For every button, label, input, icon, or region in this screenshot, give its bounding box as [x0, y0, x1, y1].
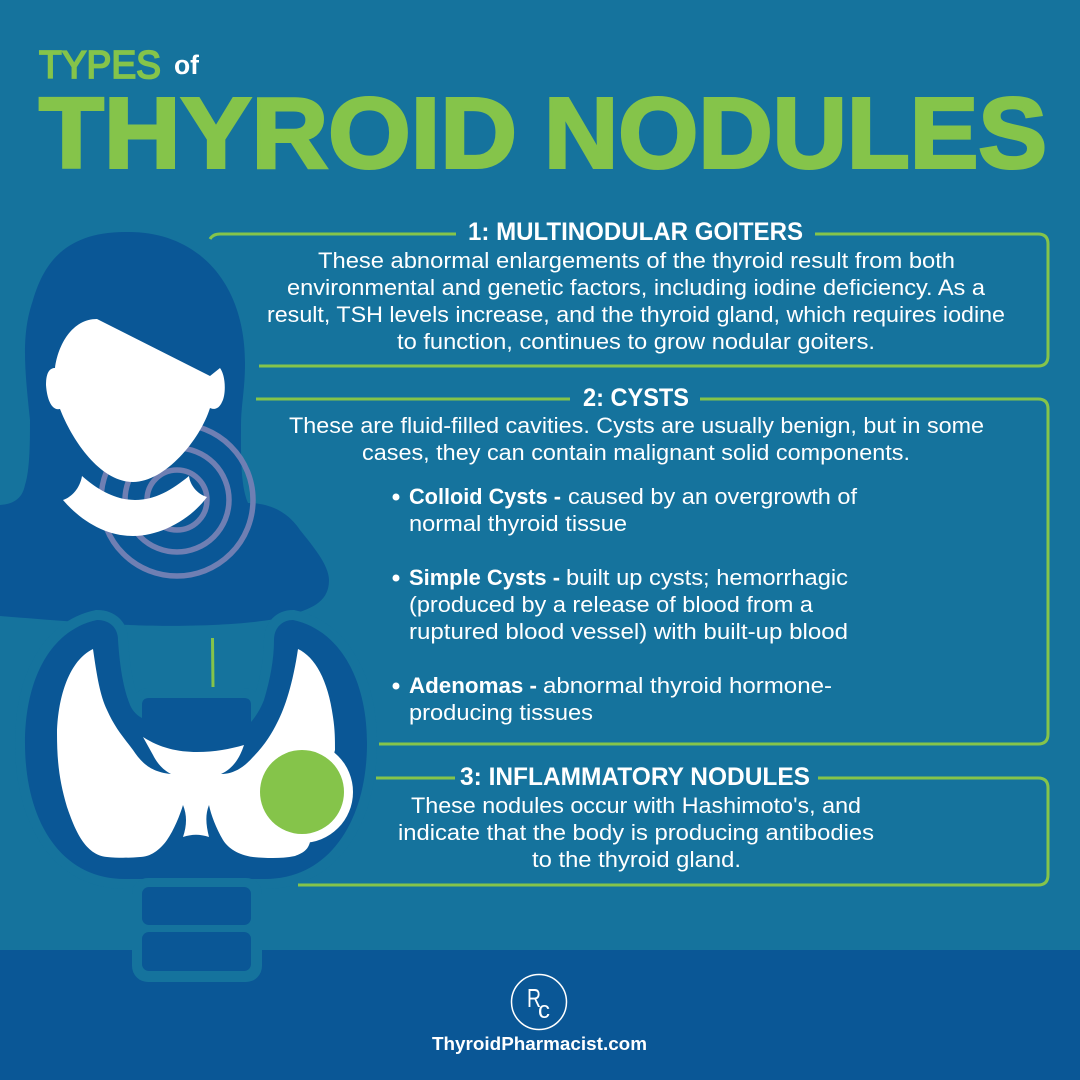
logo: RC monogram: [512, 974, 566, 1030]
title: NODULES: [544, 78, 1047, 190]
text: inflammatory nodules description: These nodules occur with Hashimoto's, and: [411, 793, 861, 818]
bullet: simple cysts: ruptured blood vessel) with built-up blood: [409, 619, 848, 644]
text: cysts description: These are fluid-filled cavities. Cysts are usually benign, but in some: [289, 413, 984, 438]
title: [39, 44, 1047, 190]
text: multinodular goiters description: These abnormal enlargements of the thyroid result from both: [318, 248, 955, 273]
text: inflammatory nodules description: to the thyroid gland.: [532, 847, 741, 872]
panel: multinodular goiters frame: [210, 234, 1048, 366]
icon: woman silhouette with neck rings: [0, 232, 329, 626]
text: multinodular goiters description: environmental and genetic factors, including iodine deficiency. As a: [287, 275, 986, 300]
text: inflammatory nodules description: indicate that the body is producing antibodies: [398, 820, 874, 845]
text: multinodular goiters description: result, TSH levels increase, and the thyroid gland, which requires iodine: [267, 302, 1005, 327]
title: THYROID: [39, 78, 517, 190]
text: multinodular goiters description: [267, 248, 1005, 354]
bullet: simple cysts: (produced by a release of blood from a: [409, 592, 814, 617]
text: inflammatory nodules description: [398, 793, 874, 872]
footer band: [0, 950, 1080, 1080]
icon: thyroid gland with nodule: [25, 620, 367, 982]
bullet: colloid cysts: normal thyroid tissue: [409, 511, 627, 536]
title: of: [174, 50, 200, 80]
panel: cysts frame: [256, 399, 1048, 744]
logo: RC monogram: c: [538, 997, 550, 1024]
text: multinodular goiters description: to function, continues to grow nodular goiters.: [397, 329, 875, 354]
text: cysts description: [289, 413, 984, 465]
heading: inflammatory nodules: 3: INFLAMMATORY NODULES: [460, 763, 810, 791]
connector line: [211, 638, 214, 687]
bullet: adenomas: [392, 673, 832, 725]
bullet: colloid cysts: caused by an overgrowth of: [568, 484, 858, 509]
heading: cysts: 2: CYSTS: [583, 384, 689, 412]
bullet: adenomas: abnormal thyroid hormone-: [543, 673, 832, 698]
bullet: colloid cysts: Colloid Cysts -: [409, 484, 561, 509]
bullet: adenomas: producing tissues: [409, 700, 593, 725]
logo: RC monogram: R: [527, 983, 541, 1013]
bullet: simple cysts: Simple Cysts -: [409, 565, 560, 590]
bullet: simple cysts: [392, 565, 848, 644]
panel: inflammatory nodules frame: [298, 778, 1048, 885]
bullet: adenomas: Adenomas -: [409, 673, 537, 698]
title: TYPES: [39, 44, 161, 87]
text: cysts description: cases, they can contain malignant solid components.: [362, 440, 910, 465]
bullet: simple cysts: built up cysts; hemorrhagic: [566, 565, 848, 590]
bullet: colloid cysts: [392, 484, 858, 536]
website url: ThyroidPharmacist.com: [432, 1034, 647, 1054]
heading: multinodular goiters: 1: MULTINODULAR GOITERS: [468, 218, 803, 246]
